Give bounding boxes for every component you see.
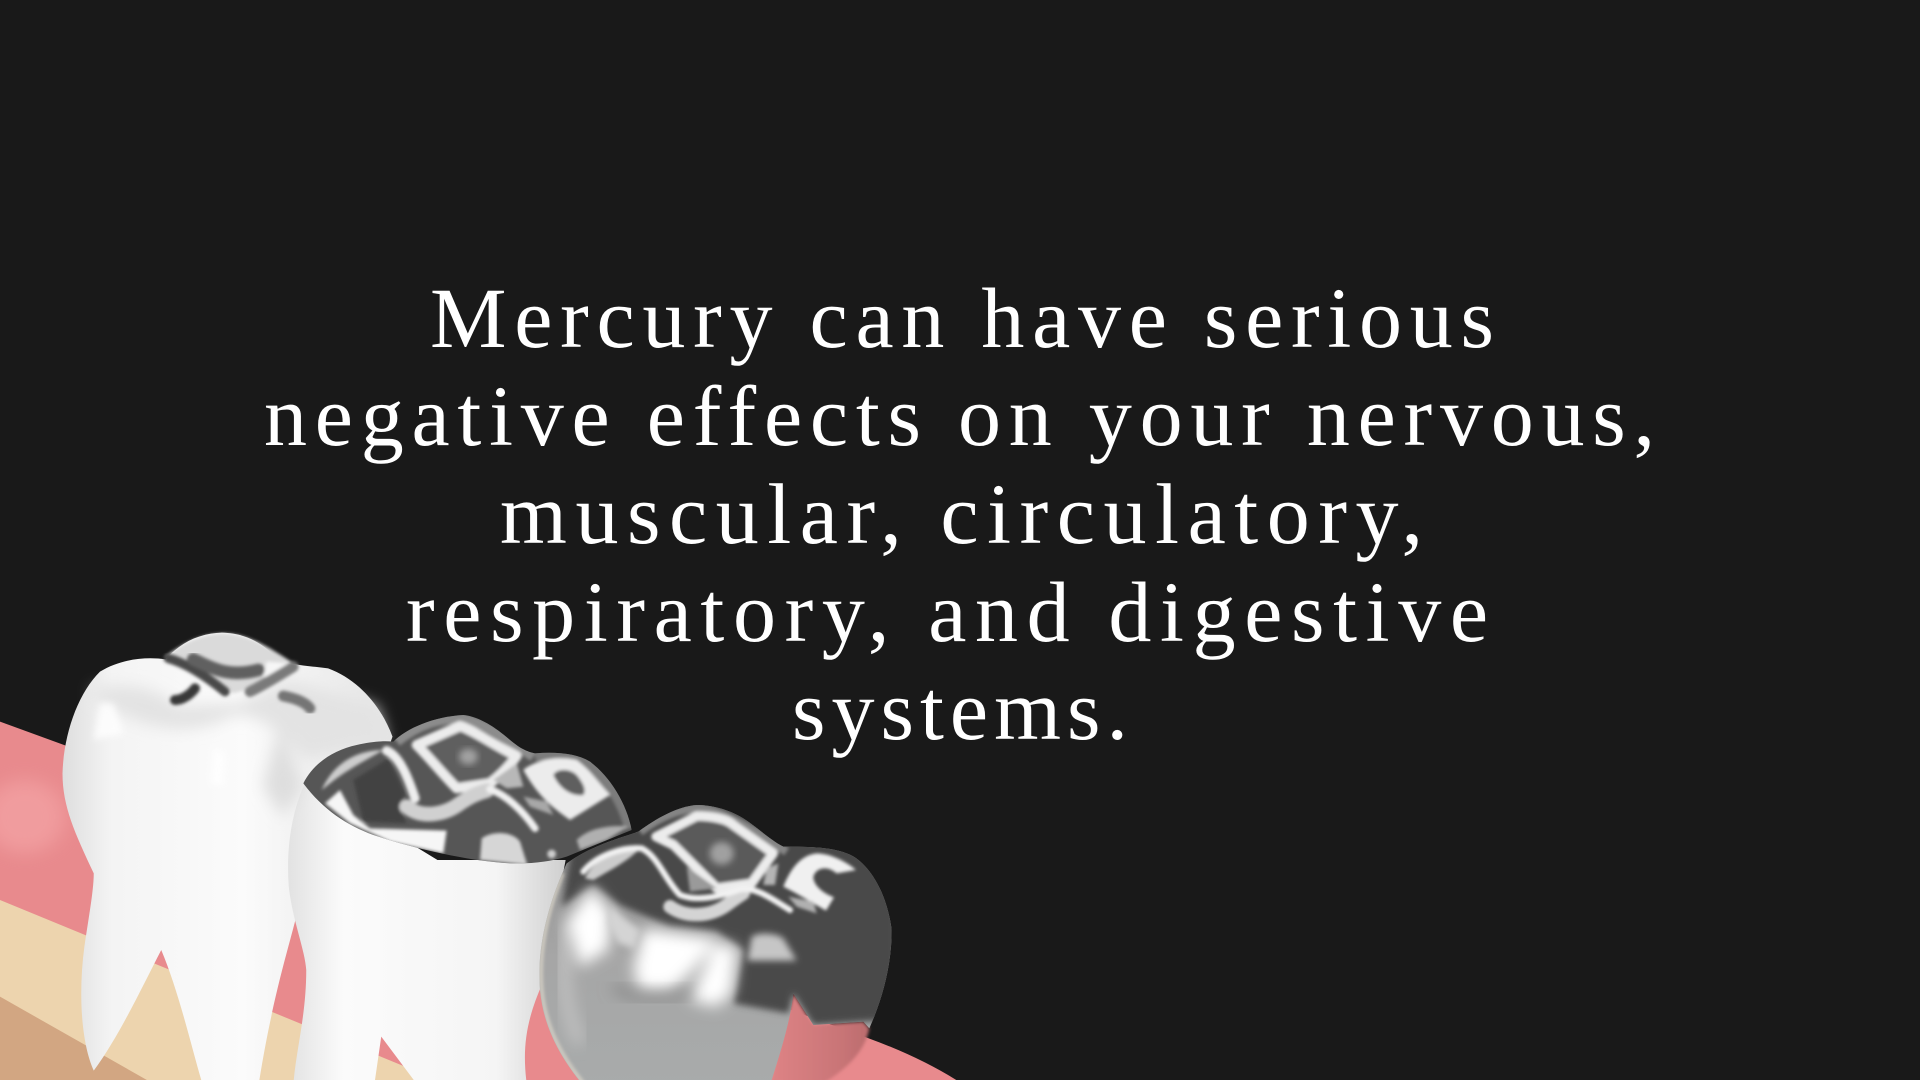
crown shading (93, 680, 387, 817)
ridge wave (670, 893, 743, 915)
line 3: muscular, circulatory, (500, 466, 1423, 562)
square ring (656, 816, 773, 888)
tooth 2 body (288, 780, 566, 1080)
left lobe band (585, 850, 638, 880)
tooth 1 body (62, 633, 392, 1080)
right ring (523, 758, 610, 820)
small filling grooves (168, 658, 310, 708)
line 4: respiratory, and digestive (406, 564, 1488, 660)
cream jaw band (0, 900, 438, 1080)
left rim (541, 873, 583, 1080)
illustration: teeth with amalgam fillings in gum (0, 633, 956, 1080)
slide canvas (0, 288, 1650, 1080)
square reflection (480, 833, 527, 865)
white lower reflection (325, 790, 447, 853)
line 1: Mercury can have serious (430, 270, 1494, 366)
line 5: systems. (792, 662, 1128, 758)
back cusp (165, 633, 293, 693)
main statement text (264, 270, 1655, 758)
dark upper band (562, 803, 897, 1025)
right ring (783, 853, 856, 911)
crown highlights (93, 703, 225, 787)
line 2: negative effects on your nervous, (264, 368, 1655, 464)
ridge wave (407, 791, 487, 814)
left lobe band (322, 750, 383, 790)
gum reflection under crown (771, 993, 869, 1080)
outer rim (640, 808, 787, 852)
dark pit (353, 758, 407, 823)
tooth 1 crown details (93, 633, 387, 817)
tooth 2 silver crown (304, 715, 632, 864)
gum highlight (0, 780, 66, 853)
gum (0, 722, 956, 1080)
reflections (567, 887, 737, 1007)
tooth 3 full silver crown (533, 800, 900, 1080)
square ring (417, 726, 517, 788)
bone (0, 997, 147, 1080)
gums, jaw and tooth roots (0, 633, 956, 1080)
outer rim (397, 718, 533, 757)
